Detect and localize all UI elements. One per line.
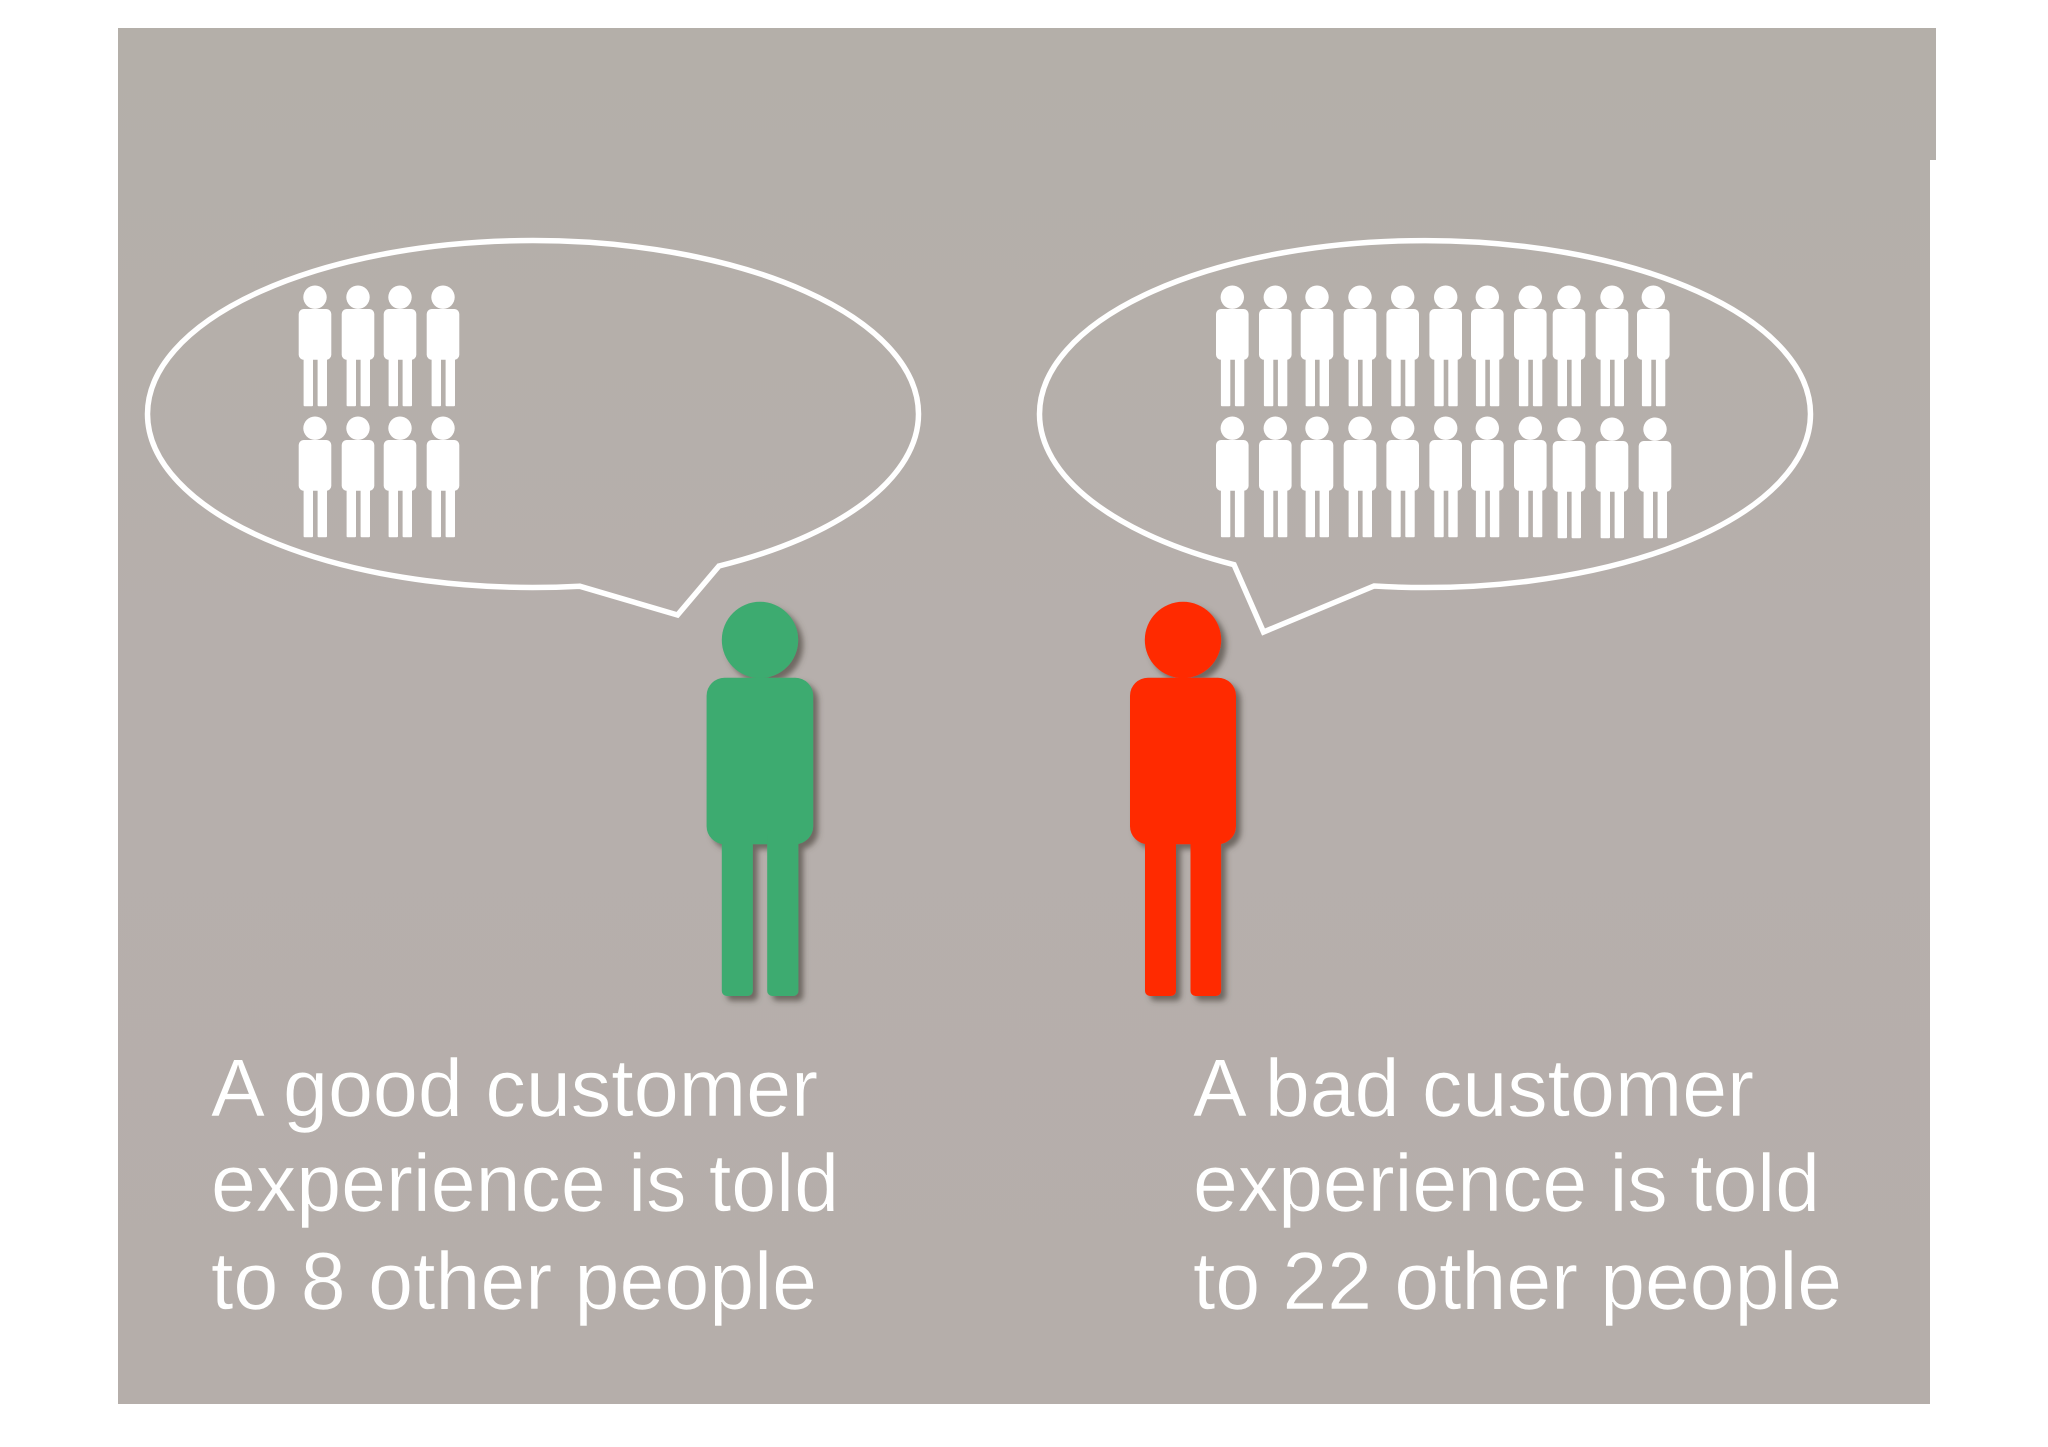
text: bad customer caption: experience is told	[1193, 1138, 1820, 1229]
speech bubble: good customer	[148, 241, 918, 615]
text: bad customer caption	[1193, 1043, 1842, 1327]
icon group: 8 people told	[299, 286, 459, 537]
text: good customer caption: to 8 other people	[211, 1236, 817, 1327]
text: bad customer caption: A bad customer	[1193, 1043, 1754, 1134]
icon: green person	[707, 602, 813, 996]
text: good customer caption: A good customer	[211, 1043, 818, 1134]
text: bad customer caption: to 22 other people	[1193, 1236, 1842, 1327]
text: good customer caption	[211, 1043, 839, 1327]
text: good customer caption: experience is told	[211, 1138, 839, 1229]
speech bubble: bad customer	[1040, 241, 1810, 632]
icon group: 22 people told	[1216, 286, 1671, 538]
icon: red person	[1130, 602, 1236, 996]
